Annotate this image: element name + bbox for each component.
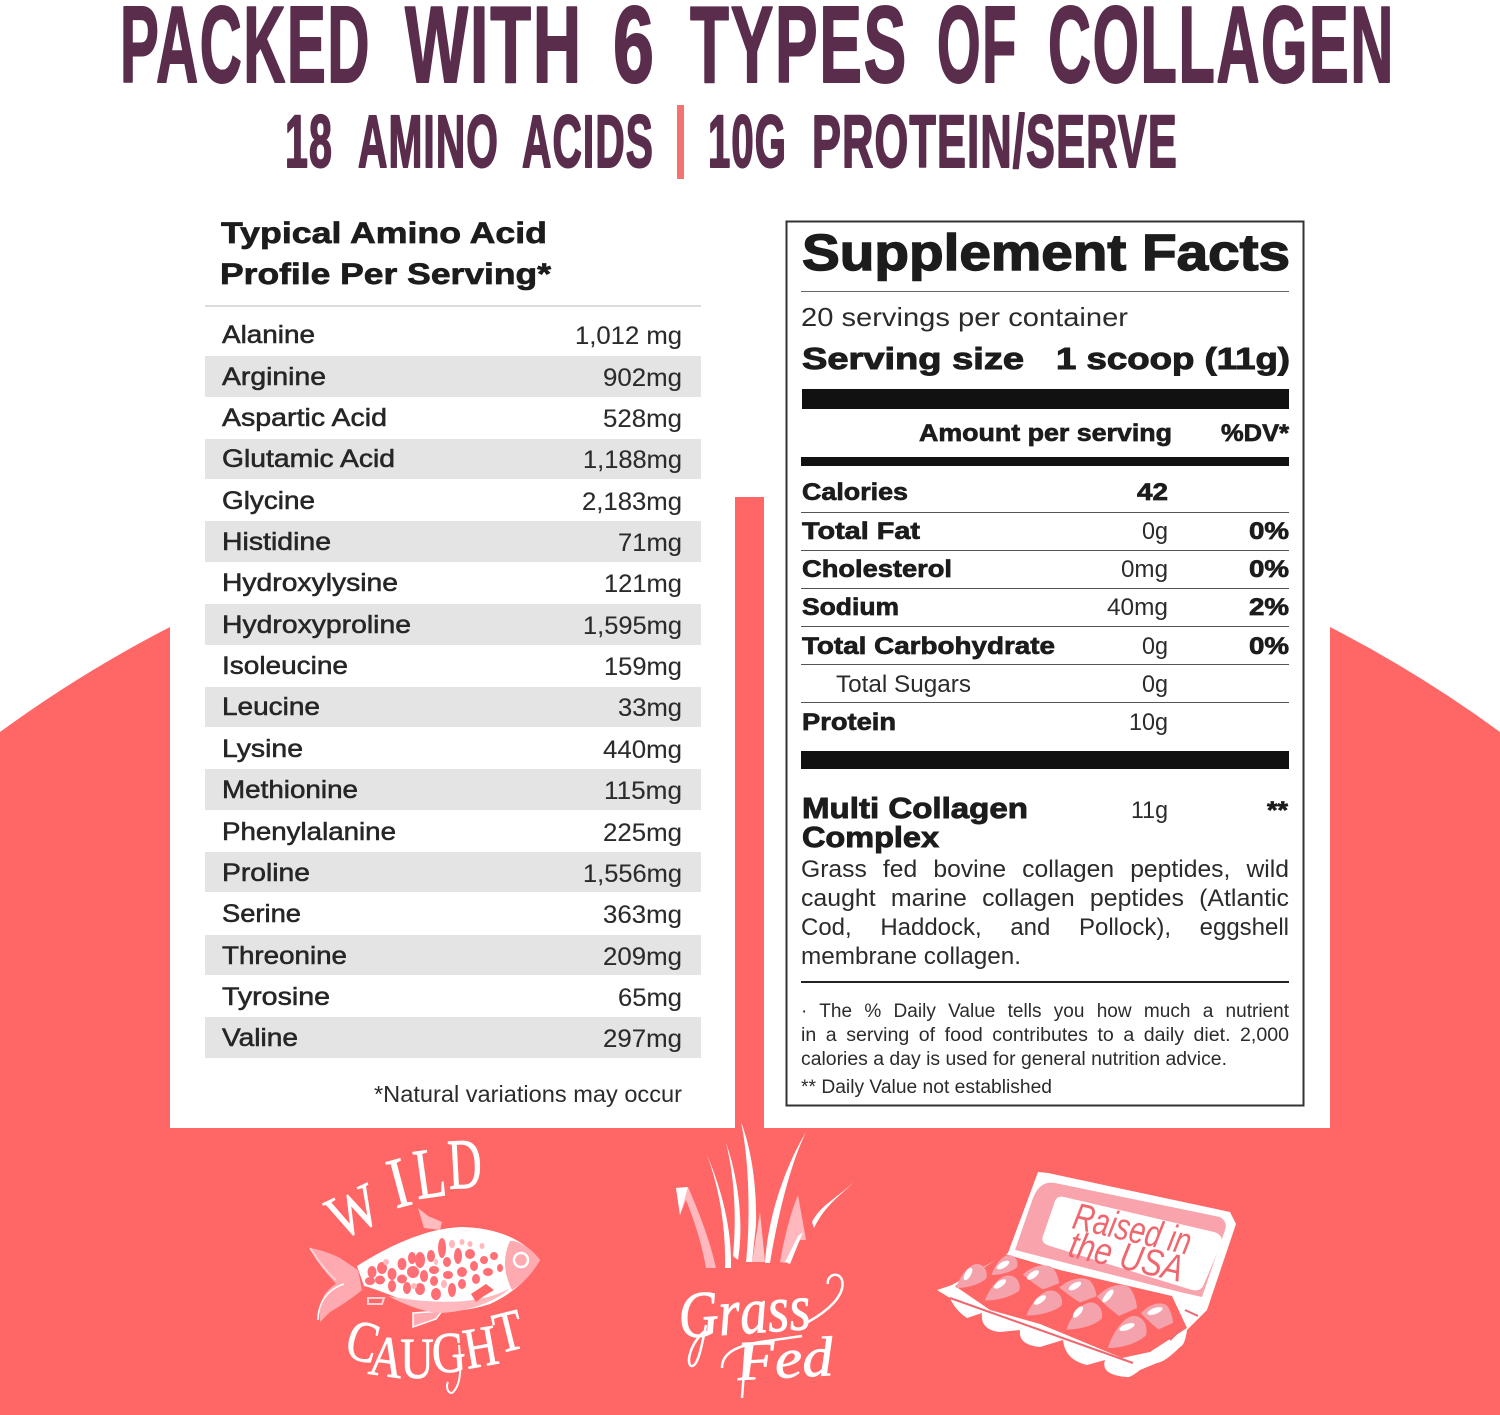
icon: grass fed [676,1122,854,1398]
wild caught lettering: C [340,1307,386,1377]
nutrition rows: Total Fat [802,518,920,545]
daily value footnotes [801,1001,1290,1098]
amino acid table: Methionine [222,776,358,804]
amino acid table: Hydroxyproline [222,611,411,639]
supplement facts heading: Supplement Facts [802,224,1290,281]
nutrition rows: Total Carbohydrate [802,633,1055,660]
multi collagen complex: Complex [802,822,939,854]
nutrition rows: Sodium [802,594,899,621]
nutrition rows: 0mg [1121,556,1168,583]
amino acid table: Isoleucine [222,652,348,680]
amino acid table: 528mg [603,405,682,433]
panel: amino acid profile [170,200,735,1128]
servings: 1 scoop (11g) [1056,341,1290,376]
carton lid inner [1015,1183,1226,1297]
fish body [357,1227,540,1311]
wild caught lettering: T [487,1297,530,1366]
wild caught lettering [317,1124,530,1393]
nutrition rows: 0% [1249,633,1289,660]
nutrition rows: Cholesterol [802,556,952,583]
multi collagen complex: Cod, Haddock, and Pollock), eggshell [801,914,1289,941]
amount header: Amount per serving [919,420,1172,447]
amino acid table: Serine [222,900,301,928]
amino acid table: 297mg [603,1025,682,1053]
amino acid table [205,321,701,1058]
wild caught lettering: U [400,1327,434,1391]
subtitle: 10G [708,100,787,183]
amino acid table: 440mg [603,736,682,764]
fish tail and fins [310,1208,442,1327]
multi collagen complex: Grass fed bovine collagen peptides, wild [801,856,1289,883]
lid label [1042,1197,1222,1290]
multi collagen complex: ** [1267,797,1289,824]
nutrition rows: 0% [1249,518,1289,545]
amino acid footnote: *Natural variations may occur [374,1081,682,1107]
wild caught lettering: A [366,1323,408,1391]
multi collagen complex: membrane collagen. [801,943,1021,970]
daily value footnotes: calories a day is used for general nutrition advice. [801,1049,1227,1070]
multi collagen complex: Multi Collagen [802,793,1028,825]
amino acid table: 159mg [604,653,682,681]
nutrition rows: Protein [802,709,896,736]
amino acid table: Aspartic Acid [222,404,387,432]
servings [801,302,1290,376]
amino acid table: Hydroxylysine [222,569,398,597]
amino acid table: 121mg [604,570,682,598]
amino acid table: 1,556mg [583,860,682,888]
amino acid table: 902mg [603,364,682,392]
amino acid table: Leucine [222,693,320,721]
nutrition rows: Calories [802,479,908,506]
amino acid table: 1,012 mg [575,322,682,350]
amino acid heading: Typical Amino Acid [221,217,547,250]
amino acid table: Glutamic Acid [222,445,395,473]
amino acid table: 2,183mg [582,488,682,516]
amino acid table: Threonine [222,942,347,970]
daily value footnotes: in a serving of food contributes to a daily diet. 2,000 [801,1025,1289,1046]
nutrition rows: 0% [1249,556,1289,583]
servings: 20 servings per container [801,302,1128,332]
wild caught lettering: G [430,1320,468,1386]
carton silhouette [937,1172,1236,1377]
grass fed lettering: Fed [734,1326,836,1393]
servings: Serving size [802,341,1024,376]
subtitle: PROTEIN/SERVE [812,100,1178,183]
nutrition rows: 2% [1249,594,1289,621]
amino acid table: 71mg [618,529,682,557]
amino acid table: Lysine [222,735,303,763]
nutrition rows: 42 [1137,479,1168,506]
amino acid table: Proline [222,859,310,887]
nutrition rows: 0g [1142,633,1168,660]
multi collagen complex [801,793,1289,970]
wild caught lettering: D [446,1124,484,1205]
fish scales [365,1238,503,1300]
icon: egg carton raised in the USA [937,1172,1236,1377]
wild caught lettering: H [459,1313,503,1382]
subtitle [285,100,1178,183]
nutrition rows: 0g [1142,671,1168,698]
raised in the usa lettering [1065,1196,1195,1291]
wild caught lettering: L [409,1133,450,1215]
subtitle: 18 [285,100,333,183]
amount header: %DV* [1221,420,1290,447]
amino acid table: 115mg [604,777,682,805]
raised in the usa lettering: Raised in [1069,1196,1195,1264]
nutrition rows: 0g [1142,518,1168,545]
egg tray [955,1254,1187,1358]
grass fed lettering [676,1271,843,1398]
amino acid table: 1,595mg [583,612,682,640]
amino acid table: Phenylalanine [222,818,396,846]
subtitle: AMINO [358,100,499,183]
amino acid table: 1,188mg [583,446,682,474]
amino acid table: 209mg [603,943,682,971]
subtitle: ACIDS [522,100,654,183]
wild caught lettering: W [317,1170,391,1253]
amount header [919,420,1290,447]
panel: supplement facts [764,200,1330,1128]
grass fed lettering: Grass [676,1271,813,1353]
multi collagen complex: caught marine collagen peptides (Atlantic [801,885,1289,912]
multi collagen complex: 11g [1131,797,1168,824]
nutrition rows: Total Sugars [836,671,971,698]
tray rim detail [950,1298,1198,1363]
icon: wild caught fish [310,1124,540,1393]
amino acid heading [220,217,551,291]
title [120,0,1395,106]
nutrition rows: 10g [1129,709,1168,736]
amino acid heading: Profile Per Serving* [220,258,551,291]
grass blades [676,1122,854,1268]
daily value footnotes: · The % Daily Value tells you how much a nutrient [801,1001,1290,1022]
nutrition rows: 40mg [1107,594,1168,621]
amino acid table: Glycine [222,487,315,515]
daily value footnotes: ** Daily Value not established [801,1077,1052,1098]
amino acid table: 33mg [618,694,682,722]
wild caught lettering: I [379,1143,419,1224]
raised in the usa lettering: the USA [1065,1224,1187,1291]
amino acid table: Tyrosine [222,983,330,1011]
amino acid table: Alanine [222,321,315,349]
amino acid table: Histidine [222,528,331,556]
nutrition rows [801,479,1289,736]
amino acid table: Arginine [222,363,326,391]
amino acid table: 363mg [603,901,682,929]
eggs [956,1255,1173,1348]
amino acid table: 65mg [618,984,682,1012]
amino acid table: 225mg [603,819,682,847]
amino acid table: Valine [222,1024,298,1052]
